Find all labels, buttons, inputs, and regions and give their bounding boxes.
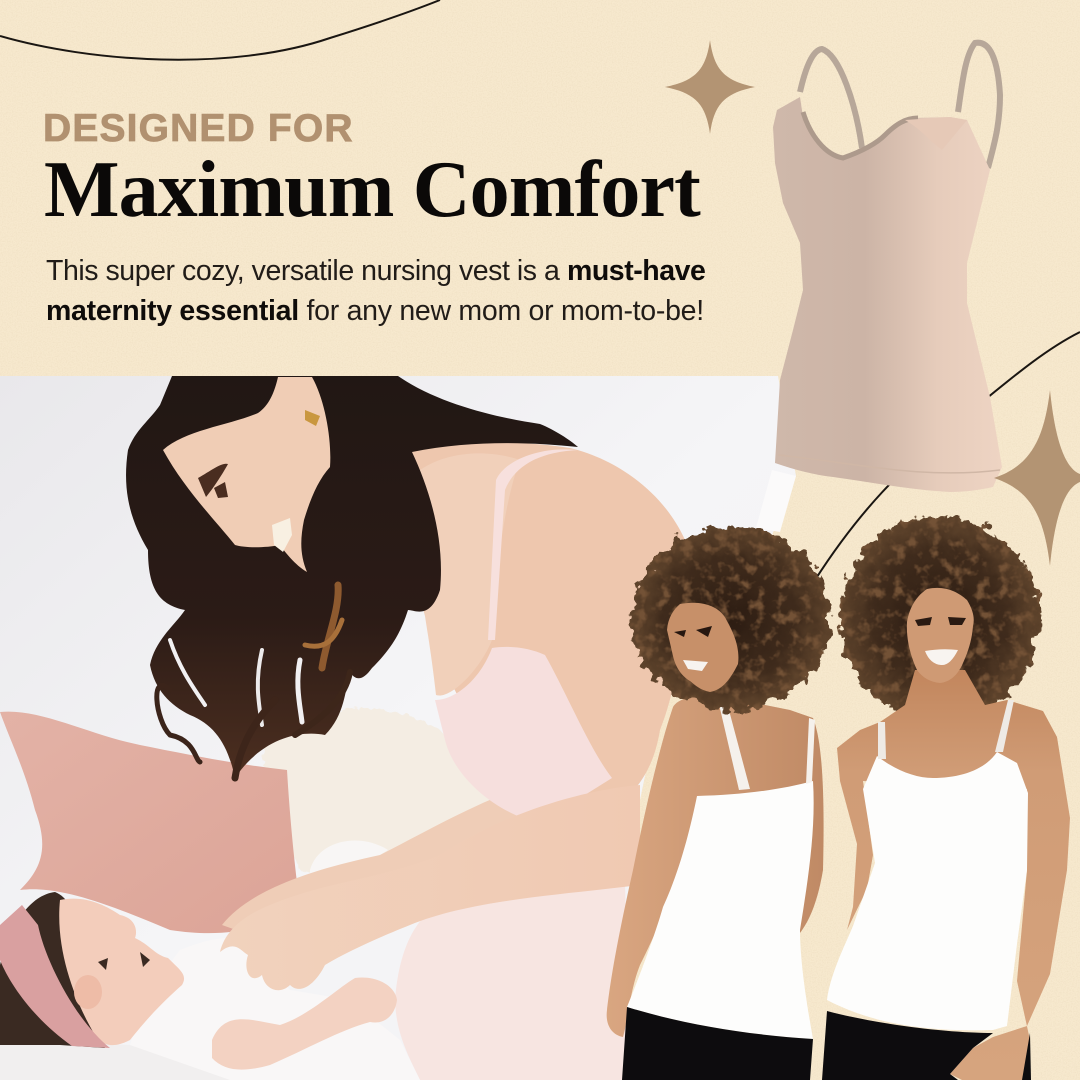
smile	[925, 649, 958, 665]
decorative curve: top	[0, 0, 440, 60]
star: top	[665, 40, 755, 134]
mother: teeth	[272, 518, 292, 552]
face	[667, 603, 738, 692]
heading: designed for: DESIGNED FOR	[43, 107, 354, 150]
star: right	[994, 390, 1080, 566]
mother: pink nursing top	[435, 647, 612, 823]
leggings	[822, 1011, 993, 1080]
vest: lace neckline	[803, 112, 918, 158]
hair	[839, 516, 1039, 720]
face	[907, 588, 974, 683]
mother: brow and eye	[198, 464, 228, 498]
decorative curve: right	[815, 332, 1080, 580]
bed sheet	[0, 1040, 350, 1080]
pillow: white fluffy	[262, 708, 520, 880]
baby: head	[59, 899, 184, 1045]
baby: hair	[0, 892, 105, 1048]
white vest	[627, 781, 814, 1039]
white strap below product	[756, 470, 796, 532]
baby: eye and mouth	[98, 952, 150, 970]
mother: chest highlight	[417, 453, 520, 696]
mother: hair highlight and gaps between locks	[157, 585, 350, 778]
mother: strap	[488, 449, 578, 640]
product: beige nursing vest	[773, 43, 1002, 492]
vest body	[773, 97, 1002, 492]
mother: striped trousers	[395, 884, 630, 1080]
straps	[718, 699, 750, 790]
back and arms	[607, 696, 824, 1037]
text block: description: This super cozy, versatile nursing vest is a must-have	[46, 255, 705, 287]
straps	[878, 722, 886, 759]
model: back view in white vest	[607, 526, 831, 1080]
white vest	[827, 752, 1028, 1030]
mother: hair	[126, 376, 578, 778]
vest: opened nursing flap	[905, 117, 967, 150]
neck and shoulders with arms	[837, 670, 1070, 1080]
text block: description: maternity essential for any new mom or mom-to-be!	[46, 294, 704, 326]
hair	[631, 526, 831, 710]
panel: lifestyle photo of mother and baby	[0, 376, 796, 1080]
baby: arm and hand	[212, 977, 397, 1070]
text block: description	[46, 255, 705, 326]
model: front view in white vest	[822, 516, 1070, 1080]
pillow: pink	[0, 712, 300, 933]
title: Maximum Comfort	[44, 146, 700, 234]
mother: back, chest and arm	[400, 442, 686, 800]
mother: face	[163, 377, 330, 572]
baby: ear	[74, 975, 102, 1009]
leggings	[622, 1007, 813, 1080]
mother: ear and earring	[305, 410, 320, 426]
mother: front forearm and hand	[220, 785, 640, 990]
strap: left	[800, 49, 862, 148]
baby: headband	[0, 905, 110, 1048]
vest: hem line	[778, 455, 1000, 473]
mother: rear forearm	[222, 785, 530, 935]
eyes	[915, 617, 966, 626]
baby: onesie	[130, 938, 420, 1080]
strap: right	[958, 43, 1000, 168]
white bump behind hand	[310, 840, 388, 890]
smile	[683, 660, 708, 671]
eyes	[674, 626, 712, 637]
